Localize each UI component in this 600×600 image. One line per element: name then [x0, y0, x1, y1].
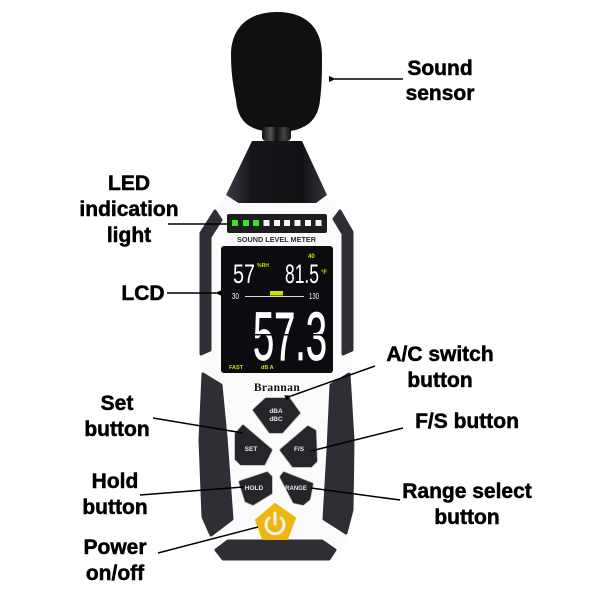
LED indication strip — [227, 214, 327, 233]
label: F/S button: F/S button — [415, 410, 519, 433]
LCD screen — [221, 246, 333, 375]
LCD screen: 130 — [309, 292, 319, 301]
LCD screen: 30 — [232, 292, 239, 301]
label: range select button: Range select — [402, 480, 532, 503]
LCD screen: 57.3 — [253, 298, 327, 375]
power button — [256, 504, 295, 539]
label: set button: button — [84, 418, 150, 441]
dBA dBC button: dBC — [269, 416, 283, 423]
LCD screen: dB A — [261, 365, 274, 371]
SET button — [236, 426, 271, 464]
F/S button: F/S — [294, 446, 305, 453]
label: sound sensor: Sound — [407, 57, 473, 80]
device title: SOUND LEVEL METER — [237, 235, 317, 244]
LCD screen: %RH — [257, 263, 269, 269]
label: set button: Set — [101, 392, 133, 415]
line: LED — [168, 223, 230, 225]
LCD screen: 57 — [233, 259, 255, 289]
meter head cone — [226, 141, 327, 203]
dBA dBC button: dBA — [269, 408, 283, 415]
right lower grip — [324, 374, 353, 533]
SET button: SET — [245, 446, 257, 453]
microphone neck — [262, 127, 291, 141]
white meter body — [200, 195, 353, 560]
line: power — [158, 527, 258, 553]
brand name: Brannan — [254, 382, 300, 394]
label: A/C switch button: button — [407, 369, 473, 392]
label: A/C switch button: A/C switch — [386, 343, 494, 366]
RANGE button — [281, 473, 312, 504]
line: range — [311, 488, 400, 500]
label: power on/off: Power — [83, 536, 147, 559]
dBA dBC button — [254, 399, 299, 432]
right upper grip — [334, 211, 352, 354]
label: LED indication light: LED — [108, 172, 150, 195]
label: LCD: LCD — [121, 282, 165, 305]
RANGE button: RANGE — [285, 486, 307, 492]
sound sensor foam ball — [231, 12, 322, 132]
HOLD button: HOLD — [245, 485, 264, 492]
LCD screen: FAST — [229, 365, 244, 371]
HOLD button — [240, 473, 271, 504]
arrow: A/C switch — [291, 366, 375, 396]
LCD screen: 81.5 — [285, 259, 319, 289]
label: LED indication light: light — [107, 224, 151, 247]
bottom bumper — [216, 541, 335, 559]
LCD screen: °F — [321, 270, 327, 276]
label: hold button: Hold — [92, 470, 138, 493]
arrow: sound sensor — [335, 78, 403, 80]
label: range select button: button — [434, 506, 500, 529]
line: hold — [140, 487, 243, 495]
label: hold button: button — [82, 496, 148, 519]
arrow: LCD — [167, 292, 216, 294]
label: sound sensor: sensor — [406, 82, 474, 105]
sound level meter device — [200, 12, 353, 560]
left lower grip — [200, 374, 232, 535]
label: power on/off: on/off — [86, 562, 145, 585]
label: LED indication light: indication — [79, 198, 179, 221]
F/S button — [281, 427, 316, 466]
line: F/S — [311, 428, 403, 451]
left upper grip — [201, 211, 221, 354]
LCD screen: 40 — [308, 254, 315, 260]
line: set — [153, 418, 243, 433]
